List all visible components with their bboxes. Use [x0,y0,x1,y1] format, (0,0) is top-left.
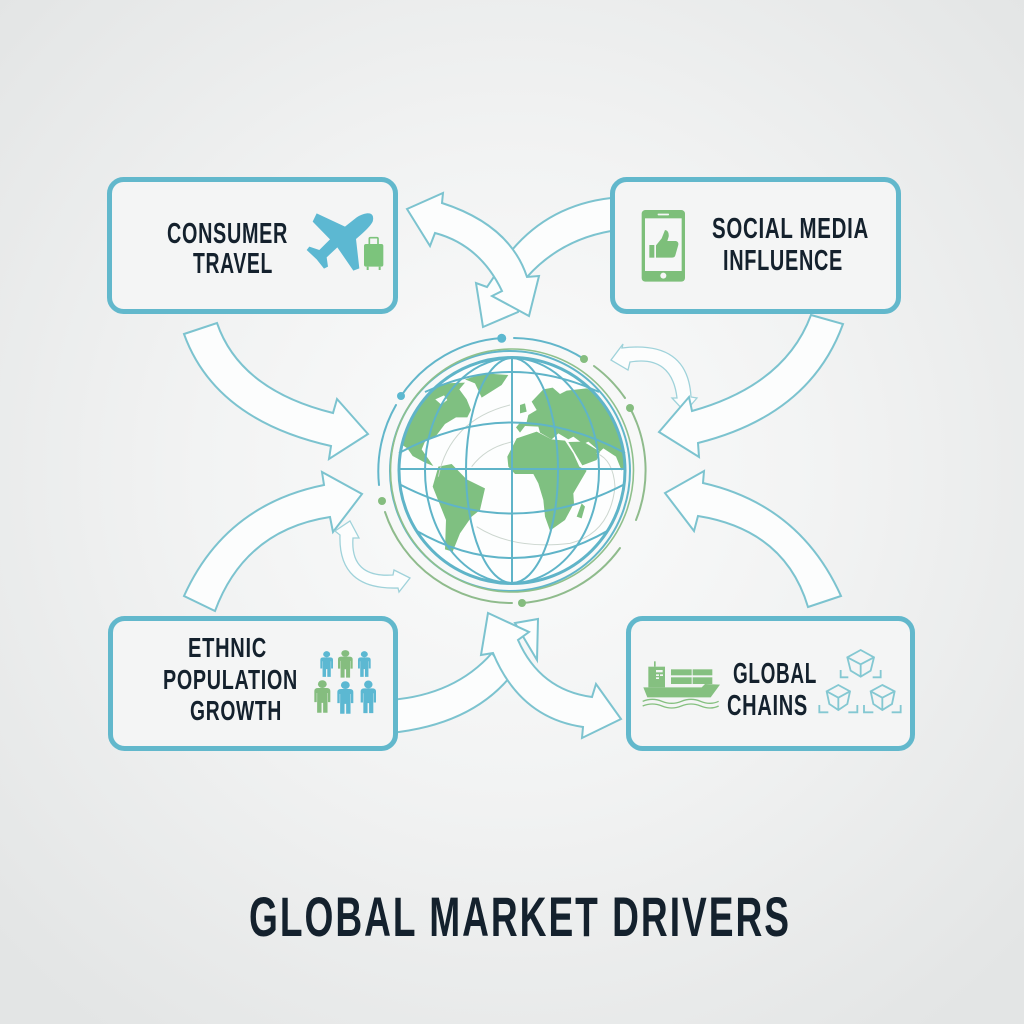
arrow: global chains to globe [665,471,841,607]
label: consumer travel: TRAVEL [193,248,273,280]
label: ethnic population growth: POPULATION [163,664,298,695]
arrow: ethnic population to globe [184,472,362,611]
panel: global chains [628,618,912,748]
icon: group of people [314,650,376,714]
label: global chains: CHAINS [727,690,808,722]
arrow: social media to globe [659,315,843,457]
label: social media influence: INFLUENCE [723,245,843,277]
label: global chains: GLOBAL [733,658,817,690]
label: ethnic population growth: ETHNIC [188,632,267,663]
orbit segments and dots [378,334,646,607]
label: ethnic population growth: GROWTH [190,695,282,726]
continents [400,373,628,552]
label: social media influence [712,213,869,277]
arrow: social media to centre [476,198,611,327]
icon: airplane and suitcase [307,213,383,271]
arrow: ethnic population to centre [390,653,510,733]
icon: container ship [643,661,720,708]
small arrow: upper right loop [611,344,697,412]
double arrow: top crossing [407,193,539,316]
arrows between drivers and globe [184,193,843,738]
globe grid lines [399,358,625,584]
globe disc [399,358,625,584]
label: social media influence: SOCIAL MEDIA [712,213,869,245]
panel: ethnic population growth [110,618,396,748]
icon: network of boxes [819,650,901,712]
globe [378,334,646,607]
arrow: consumer travel to globe [184,323,368,459]
panel: social media influence [612,180,898,312]
double arrow: bottom crossing [481,613,621,738]
arrow head: bottom rear [515,619,538,660]
label: ethnic population growth [163,632,298,726]
panel: consumer travel [110,180,396,312]
label: consumer travel [167,218,288,280]
label: global chains [727,658,817,722]
icon: phone with thumbs up [642,210,685,282]
small arrow: lower left loop [335,521,410,592]
label: consumer travel: CONSUMER [167,218,288,250]
globe rings [390,349,634,592]
